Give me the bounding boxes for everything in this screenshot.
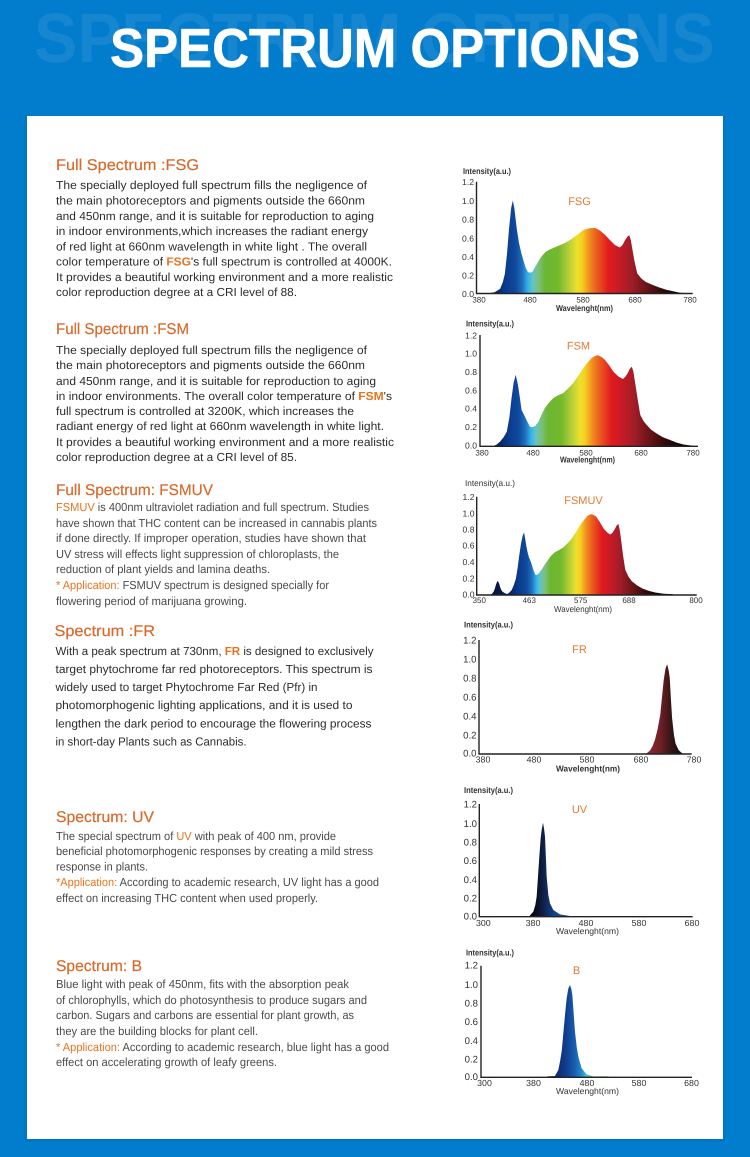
y labels [462,177,474,299]
body: FR: lengthen the dark period to encourage the flowering process [56,718,372,730]
body: UV: beneficial photomorphogenic responses by creating a mild stress [56,845,373,858]
y labels [463,492,475,600]
body: FSMUV [56,501,377,608]
y labels [464,800,478,922]
x labels: 350 [473,596,487,605]
body: FR: widely used to target Phytochrome Far Red (Pfr) in [55,681,318,694]
body: FSMUV: flowering period of marijuana growing. [56,595,247,608]
x labels: 580 [580,755,594,765]
y labels [465,960,479,1083]
body: B: of chlorophylls, which do photosynthesis to produce sugars and [56,994,367,1007]
heading: FSG: Full Spectrum :FSG [56,157,199,174]
y labels: 0.4 [462,252,474,262]
x labels: 780 [687,755,701,765]
x labels: 680 [628,296,642,305]
x title: Wavelenght(nm) [560,455,615,465]
body: FSM: radiant energy of red light at 660nm wavelength in white light. [56,420,384,433]
body: B: they are the building blocks for plant cell. [56,1025,258,1038]
title: SPECTRUM OPTIONS [110,17,640,79]
y labels: 1.0 [464,819,477,830]
x labels: 780 [686,449,700,458]
x labels: 580 [576,296,590,305]
y labels: 0.4 [463,557,475,567]
axes [480,335,698,446]
y labels: 0.6 [463,692,476,704]
chart: UV spectrum [464,785,699,936]
axes [481,966,692,1077]
x labels [477,1078,699,1088]
y labels: 0.8 [463,674,476,684]
x title: Wavelenght(nm) [554,604,612,614]
x labels: 380 [476,755,490,765]
body: FSM [56,344,394,464]
body: B: Blue light with peak of 450nm, fits with the absorption peak [56,978,349,991]
y labels: 0.8 [464,838,477,848]
y labels: 0.4 [465,404,477,414]
axes [479,804,693,917]
y labels: 0.2 [462,270,474,280]
y labels: 0.0 [464,912,477,922]
spectrum name: B [573,965,580,977]
y labels: 1.0 [465,980,478,991]
chart: B spectrum [465,948,699,1096]
axis title: Intensity(a.u.) [464,785,513,795]
body: B [56,978,389,1069]
chart: FR spectrum [463,620,701,774]
x labels [475,449,700,458]
x labels: 480 [579,918,593,928]
x labels: 680 [634,755,648,765]
body: FSG: and 450nm range, and it is suitable for reproduction to aging [56,210,374,223]
body: FSG: in indoor environments,which increases the radiant energy [56,225,368,238]
x title: Wavelenght(nm) [556,764,620,774]
y labels: 1.0 [462,196,474,206]
chart: FSG spectrum [462,166,697,313]
body: FR: photomorphogenic lighting applications, and it is used to [56,699,353,712]
body: FSMUV: UV stress will effects light suppression of chloroplasts, the [56,548,339,561]
y labels [465,330,477,450]
y labels: 0.0 [463,590,475,600]
x title: Wavelenght(nm) [556,926,619,936]
body: FSMUV: if done directly. If improper operation, studies have shown that [56,532,367,545]
x title: Wavelenght(nm) [556,1086,619,1096]
heading: UV: Spectrum: UV [56,809,155,826]
body: UV [56,830,379,905]
curve: B [547,985,608,1077]
body: UV: The special spectrum of UV with peak of 400 nm, provide [56,830,336,843]
x labels: 800 [689,596,703,605]
body: FSM: It provides a beautiful working environment and a more realistic [56,436,394,449]
x labels: 680 [684,1078,699,1088]
section: UV text [56,809,379,905]
y labels: 0.2 [464,894,477,904]
y labels: 1.2 [463,492,475,502]
y labels: 0.6 [465,385,477,395]
x title: Wavelenght(nm) [556,303,613,313]
axis title: Intensity(a.u.) [463,166,511,176]
y labels: 0.6 [465,1017,478,1028]
y labels: 1.0 [463,654,476,666]
x labels: 780 [683,296,697,305]
body: FSM: color reproduction degree at a CRI level of 85. [56,451,297,464]
body: FR: in short-day Plants such as Cannabis. [56,736,246,748]
x labels [476,918,699,928]
x labels [472,296,697,305]
axes [479,640,692,754]
spectrum name: FSG [568,196,591,208]
y labels: 0.2 [463,573,475,583]
y labels: 1.2 [463,636,476,646]
curve: FSM [493,355,697,446]
y labels: 0.2 [465,422,477,432]
axis title: Intensity(a.u.) [466,948,514,958]
y labels: 1.2 [462,177,474,187]
y labels: 0.8 [462,215,474,225]
curve: FSG [488,200,687,294]
ghost title: SPECTRUM OPTIONS [34,0,715,77]
y labels: 0.4 [465,1036,479,1047]
y labels: 0.2 [463,730,476,742]
axes [477,497,697,595]
body: B: * Application: According to academic research, blue light has a good [56,1041,389,1054]
section: FSMUV text [56,482,377,608]
body: FSM: The specially deployed full spectrum fills the negligence of [56,344,368,357]
y labels: 0.0 [465,440,477,450]
spectrum name: FSM [567,340,590,352]
y labels: 1.2 [465,960,478,972]
body: FSG: color reproduction degree at a CRI level of 88. [56,286,297,299]
x labels: 480 [526,449,540,458]
x labels: 380 [526,918,540,928]
y labels: 0.8 [463,525,475,535]
body: FSM: the main photoreceptors and pigments outside the 660nm [56,359,365,372]
x labels: 575 [574,596,588,605]
axis title: Intensity(a.u.) [465,478,515,488]
body: FSM: full spectrum is controlled at 3200K, which increases the [56,405,354,418]
body: FSM: and 450nm range, and it is suitable for reproduction to aging [56,375,376,388]
y labels [463,636,477,760]
x labels: 480 [580,1078,594,1088]
spectrum name: FR [572,644,587,656]
y labels: 0.2 [465,1054,478,1066]
body: FR: target phytochrome far red photoreceptors. This spectrum is [56,663,373,676]
heading: B: Spectrum: B [56,958,142,975]
heading: FR: Spectrum :FR [54,623,155,640]
x labels: 300 [476,918,491,928]
body: FR: With a peak spectrum at 730nm, FR is designed to exclusively [56,645,374,658]
axis title: Intensity(a.u.) [464,620,513,630]
axes [476,182,693,294]
x labels: 580 [579,449,593,458]
y labels: 0.4 [464,875,478,886]
x labels: 463 [523,596,537,605]
x labels: 688 [622,596,636,605]
y labels: 0.0 [465,1072,478,1083]
x labels: 580 [632,918,646,928]
body: FSG: of red light at 660nm wavelength in white light . The overall [56,240,367,254]
body: FSMUV: reduction of plant yields and lamina deaths. [56,563,270,576]
body: FSM: in indoor environments. The overall color temperature of FSM's [56,390,392,403]
body: FR [55,645,374,748]
y labels: 0.6 [463,541,475,551]
y labels: 0.8 [465,998,478,1010]
x labels: 380 [526,1078,541,1088]
section: B text [56,958,389,1069]
body: FSMUV: have shown that THC content can be increased in cannabis plants [56,517,377,530]
x labels: 680 [685,918,699,928]
axis title: Intensity(a.u.) [466,319,514,329]
y labels: 1.0 [463,509,475,519]
curve: UV [529,823,597,917]
body: FSG: The specially deployed full spectrum fills the negligence of [56,179,368,192]
body: FSG: It provides a beautiful working environment and a more realistic [56,271,393,284]
body: UV: response in plants. [56,860,148,874]
y labels: 1.2 [465,330,477,340]
body: FSMUV: FSMUV is 400nm ultraviolet radiation and full spectrum. Studies [56,501,369,514]
curve: FR [645,664,684,754]
x labels: 380 [475,449,489,458]
y labels: 0.0 [463,748,476,760]
y labels: 0.6 [462,233,474,243]
section: FSG text [56,157,393,299]
body: FSMUV: * Application: FSMUV spectrum is designed specially for [56,579,329,592]
chart: FSM spectrum [465,319,700,465]
heading: FSMUV: Full Spectrum: FSMUV [56,482,214,499]
section: FR text [54,623,374,748]
body: B: carbon. Sugars and carbons are essential for plant growth, as [56,1009,354,1022]
body: UV: effect on increasing THC content when used properly. [56,892,318,905]
x labels: 480 [523,296,537,305]
x labels [473,596,703,605]
chart: FSMUV spectrum [463,478,703,614]
body: B: effect on accelerating growth of leafy greens. [56,1056,277,1069]
y labels: 1.0 [465,349,477,359]
x labels: 380 [472,296,486,305]
x labels [476,755,701,765]
section: FSM text [56,321,394,464]
y labels: 0.8 [465,367,477,377]
x labels: 300 [477,1078,492,1088]
y labels: 1.2 [464,800,477,810]
body: UV: *Application: According to academic research, UV light has a good [56,876,379,889]
spectrum name: FSMUV [564,495,603,507]
x labels: 480 [527,755,541,765]
y labels: 0.4 [463,712,477,722]
x labels: 580 [632,1078,646,1088]
y labels: 0.0 [462,289,474,299]
body: FSG [56,179,393,299]
curve: FSMUV [490,514,675,595]
y labels: 0.6 [464,856,477,867]
heading: FSM: Full Spectrum :FSM [56,321,189,338]
x labels: 680 [634,449,648,458]
spectrum name: UV [572,804,588,816]
body: FSG: the main photoreceptors and pigments outside the 660nm [56,194,365,208]
body: FSG: color temperature of FSG's full spectrum is controlled at 4000K. [56,256,392,268]
